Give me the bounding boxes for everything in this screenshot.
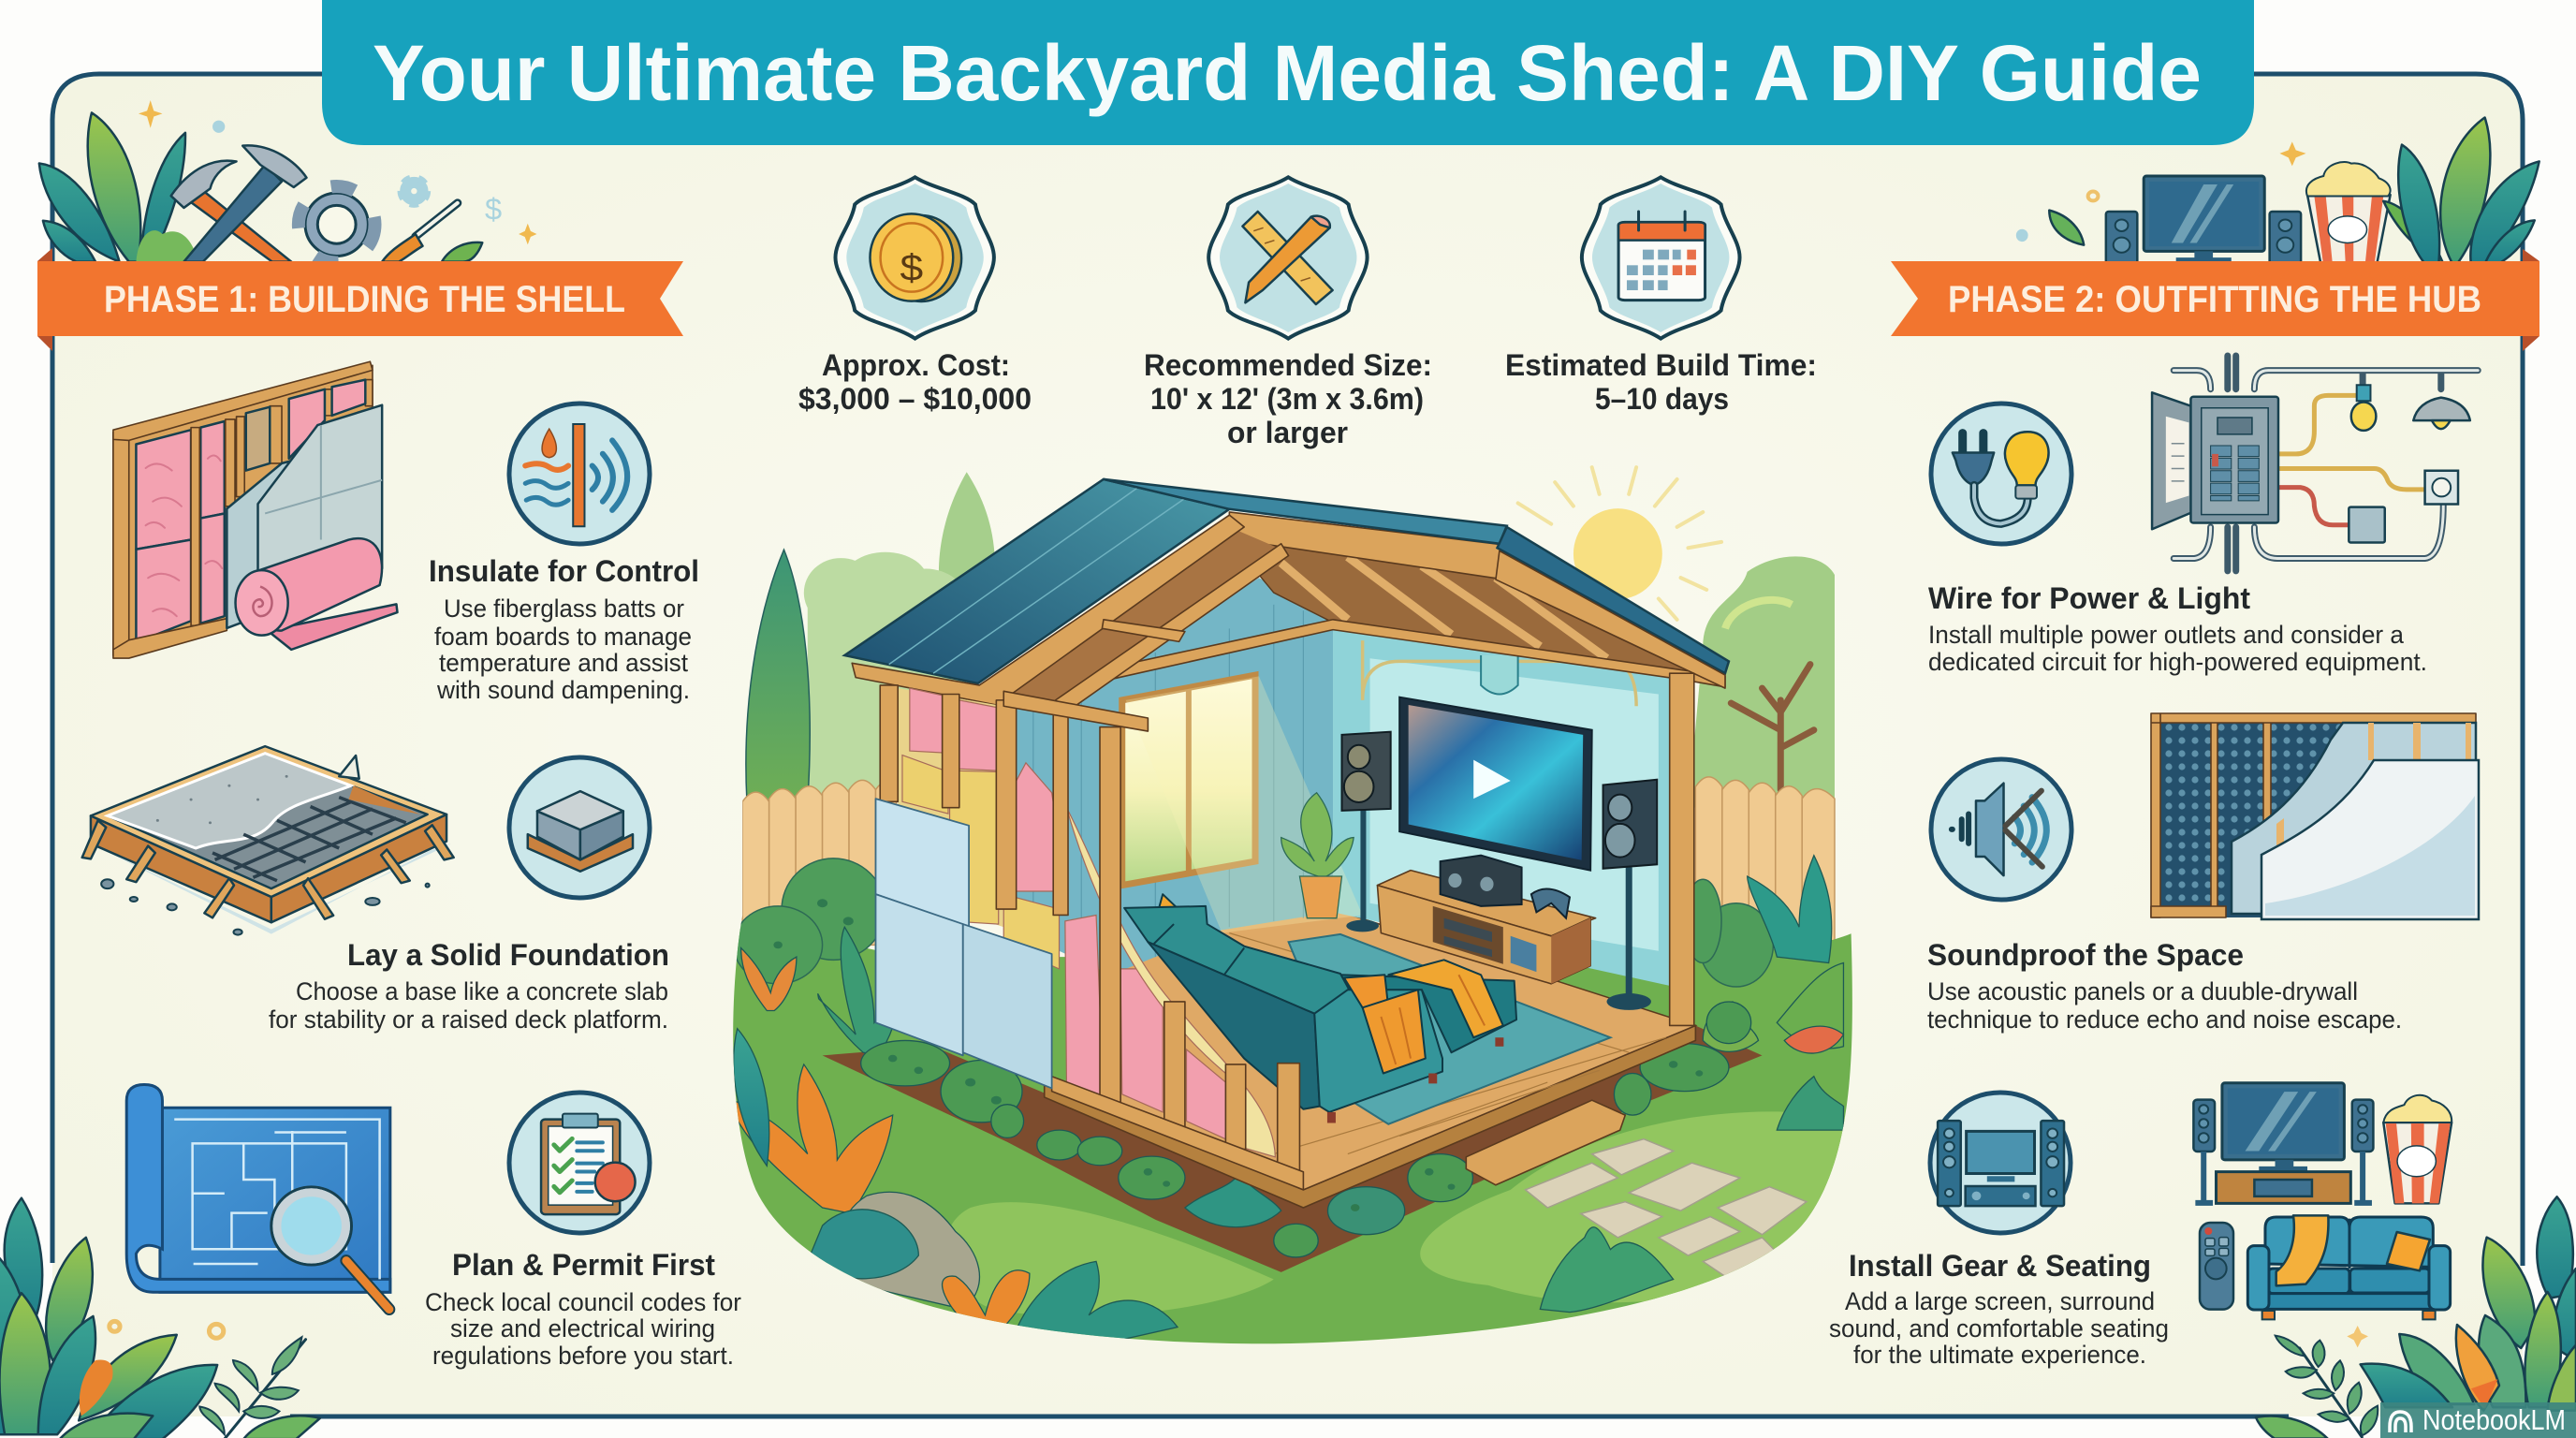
title banner (322, 0, 2254, 145)
sofa (1124, 894, 1516, 1123)
ribbon: phase 1 (37, 248, 683, 351)
illustration: acoustic panels and double drywall (2151, 713, 2479, 919)
text: plan and permit first: size and electrical wiring (450, 1314, 715, 1343)
badge: build time (1582, 177, 1740, 339)
text: soundproof the space: Soundproof the Space (1927, 938, 2244, 972)
text: insulate for control (429, 554, 699, 704)
illustration: electrical panel and wiring (2152, 356, 2478, 571)
text: plan and permit first: regulations before you start. (432, 1342, 734, 1370)
step (1466, 1100, 1625, 1185)
text: lay a solid foundation (269, 938, 669, 1034)
text: install gear and seating: Install Gear & Seating (1849, 1249, 2151, 1283)
text: wire for power and light (1928, 581, 2427, 676)
roof (844, 479, 1729, 712)
speakers (1342, 732, 1657, 1010)
illustration: remote and sofa (2200, 1215, 2451, 1319)
window (1122, 675, 1363, 933)
decoration: tools and plants, top left: $ (485, 192, 502, 227)
text: insulate for control: Insulate for Control (429, 554, 699, 588)
soil bed (823, 1025, 1763, 1272)
text: plan and permit first (425, 1248, 741, 1370)
stat: size: or larger (1227, 416, 1348, 449)
stat: cost: $3,000 – $10,000 (798, 382, 1032, 416)
rafters (1111, 512, 1725, 687)
illustration: media gear set (2193, 1083, 2452, 1203)
fences (742, 777, 1835, 945)
left bushes (734, 858, 1773, 987)
stat: size: Recommended Size: (1144, 348, 1432, 382)
tv stand (1377, 856, 1596, 984)
icon: foundation circle (509, 757, 650, 898)
text: insulate for control: foam boards to manage (434, 623, 692, 651)
stepping stones (1526, 1139, 1807, 1276)
badge: approximate cost: $ (900, 247, 923, 288)
text: soundproof the space: technique to reduce echo and noise escape. (1927, 1005, 2402, 1034)
deck floor (1045, 1025, 1695, 1208)
text: plan and permit first: Check local council codes for (425, 1288, 741, 1316)
icon: insulate circle (509, 404, 650, 544)
stat: size (1144, 348, 1432, 449)
stat: build time: 5–10 days (1595, 382, 1729, 416)
front wall studs (880, 685, 1303, 1190)
illustration: insulated wall with roll (113, 361, 397, 658)
badge: recommended size (1208, 177, 1368, 339)
grass (711, 927, 1866, 1357)
text: wire for power and light: Install multiple power outlets and consider a (1928, 621, 2405, 649)
text: insulate for control: with sound dampening. (436, 676, 690, 704)
text: lay a solid foundation: Lay a Solid Foundation (347, 938, 669, 972)
text: lay a solid foundation: for stability or a raised deck platform. (269, 1005, 668, 1034)
text: lay a solid foundation: Choose a base like a concrete slab (296, 977, 668, 1005)
ribbon: phase 2: PHASE 2: OUTFITTING THE HUB (1948, 279, 2481, 320)
text: insulate for control: Use fiberglass batts or (444, 594, 684, 623)
icon: plug and bulb circle (1931, 404, 2071, 544)
icon: home theatre circle (1930, 1093, 2071, 1233)
front wall insulation (898, 688, 1275, 1157)
insulation boards (875, 799, 1052, 1088)
illustration: concrete foundation (82, 746, 454, 935)
text: install gear and seating: for the ultimate experience. (1853, 1341, 2146, 1369)
text: wire for power and light: dedicated circuit for high-powered equipment. (1928, 648, 2427, 676)
text: insulate for control: temperature and assist (439, 649, 688, 677)
icon: muted speaker circle (1931, 759, 2071, 900)
decoration: plants, bottom left (0, 1198, 320, 1438)
ribbon: phase 2 (1891, 249, 2539, 351)
right frame post (1670, 673, 1694, 1025)
decoration: tools and plants, top left (39, 100, 536, 263)
potted plant (1281, 793, 1354, 918)
stat: build time: Estimated Build Time: (1505, 348, 1817, 382)
text: soundproof the space: Use acoustic panels or a duuble-drywall (1927, 977, 2358, 1005)
garden background (711, 467, 1866, 1357)
badge: approximate cost (835, 177, 994, 339)
illustration: blueprint and magnifier (126, 1084, 390, 1310)
title: Your Ultimate Backyard Media Shed: A DIY Guide (373, 29, 2202, 117)
text: install gear and seating (1829, 1249, 2169, 1369)
icon: clipboard circle (509, 1093, 650, 1233)
stat: build time (1505, 348, 1817, 416)
stat: size: 10' x 12' (3m x 3.6m) (1150, 382, 1424, 416)
decoration: plants, bottom right (2256, 1196, 2576, 1438)
decoration: tv, popcorn and plants, top right (2016, 118, 2539, 266)
text: plan and permit first: Plan & Permit First (452, 1248, 715, 1282)
rug (1289, 934, 1610, 1124)
garden plants (726, 856, 1843, 1343)
text: wire for power and light: Wire for Power & Light (1928, 581, 2250, 615)
tv (1399, 697, 1592, 871)
text: soundproof the space (1927, 938, 2402, 1034)
text: install gear and seating: Add a large screen, surround (1845, 1287, 2155, 1315)
stat: cost (798, 348, 1032, 416)
back walls (1007, 578, 1333, 975)
ribbon: phase 1: PHASE 1: BUILDING THE SHELL (104, 279, 625, 320)
central illustration: cutaway media shed in garden (711, 467, 1866, 1357)
text: install gear and seating: sound, and comfortable seating (1829, 1314, 2169, 1343)
stat: cost: Approx. Cost: (822, 348, 1010, 382)
